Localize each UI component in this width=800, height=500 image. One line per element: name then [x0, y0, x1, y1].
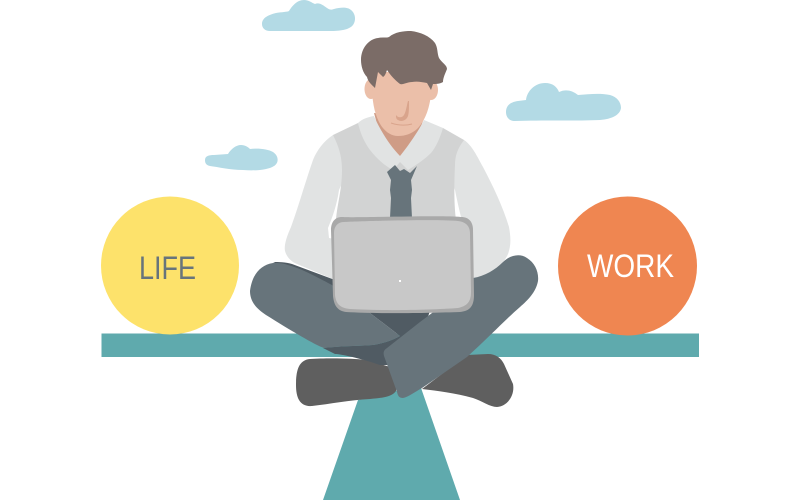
- right foot: [422, 354, 513, 407]
- work label: WORK: [587, 248, 674, 284]
- ear right: [424, 80, 438, 100]
- seesaw pedestal: [323, 385, 460, 500]
- vest: [333, 123, 464, 220]
- hair: [361, 31, 447, 90]
- shirt sleeves: [285, 135, 348, 282]
- cloud: top: [262, 0, 355, 31]
- face: [372, 72, 432, 136]
- cloud: left: [205, 145, 278, 170]
- tie: [387, 165, 417, 218]
- left foot: [296, 358, 400, 406]
- laptop logo dot: [399, 280, 401, 282]
- crossing leg behind: [323, 290, 432, 365]
- mouth: [391, 123, 412, 125]
- cloud: right: [506, 83, 621, 121]
- collar: [358, 116, 443, 170]
- ear left: [364, 79, 378, 99]
- work ball: [558, 196, 697, 336]
- left leg: [250, 263, 400, 348]
- right leg: [384, 255, 538, 398]
- man meditating with laptop: [250, 31, 538, 407]
- neck shadow: [374, 113, 424, 157]
- seesaw beam: [102, 334, 699, 357]
- laptop: [331, 216, 474, 313]
- nose: [396, 101, 409, 121]
- life label: LIFE: [139, 250, 196, 286]
- life ball: [101, 196, 239, 334]
